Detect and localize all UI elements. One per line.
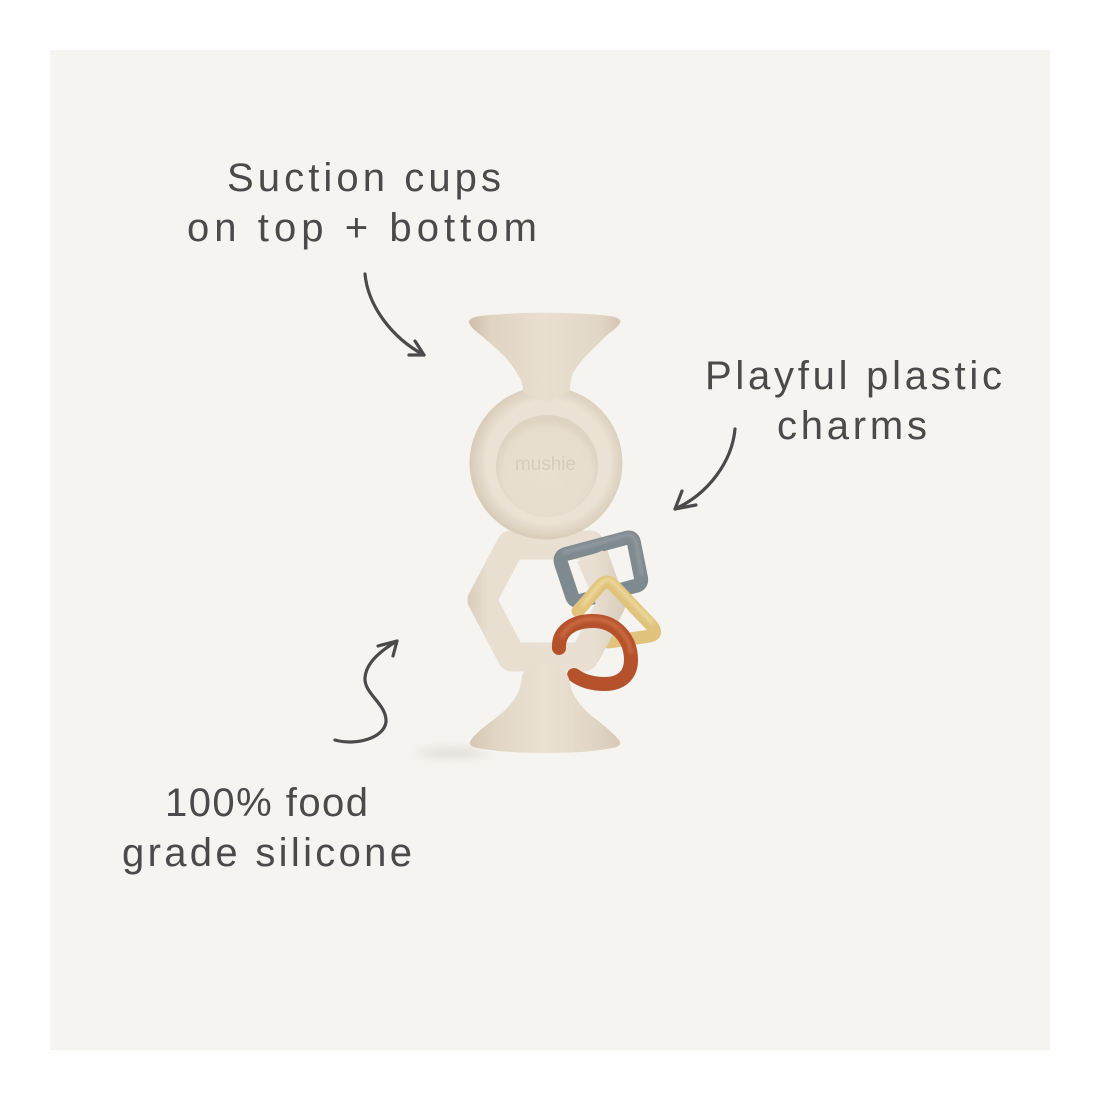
callout: plastic charms xyxy=(705,354,1002,448)
callout: food grade silicone xyxy=(122,781,412,875)
callout: food grade silicone: grade silicone xyxy=(122,831,412,875)
callout: plastic charms: charms xyxy=(777,404,927,448)
arrow: to silicone body xyxy=(335,641,397,742)
frame bar over yellow base xyxy=(586,622,604,655)
centre disc xyxy=(496,415,598,517)
yellow triangle charm xyxy=(578,580,655,642)
embossed logo: mushie xyxy=(515,454,576,475)
bottom suction cup xyxy=(470,663,620,753)
callout: suction cups xyxy=(187,156,537,250)
callout: suction cups: Suction cups xyxy=(227,156,501,200)
circular body xyxy=(470,386,622,540)
diagonal frame bar over grey charm xyxy=(586,556,611,655)
red ring charm xyxy=(559,619,631,684)
arrow: to top suction cup xyxy=(365,274,424,355)
callout: suction cups: on top + bottom xyxy=(187,206,537,250)
hexagon frame xyxy=(482,545,611,657)
ground shadow xyxy=(416,749,488,757)
grey square charm xyxy=(561,535,642,601)
arrow: to charms xyxy=(675,429,735,509)
callout: plastic charms: Playful plastic xyxy=(705,354,1002,398)
product: silicone toy xyxy=(416,313,655,757)
top suction cup xyxy=(469,313,620,403)
callout: food grade silicone: 100% food xyxy=(165,781,368,825)
